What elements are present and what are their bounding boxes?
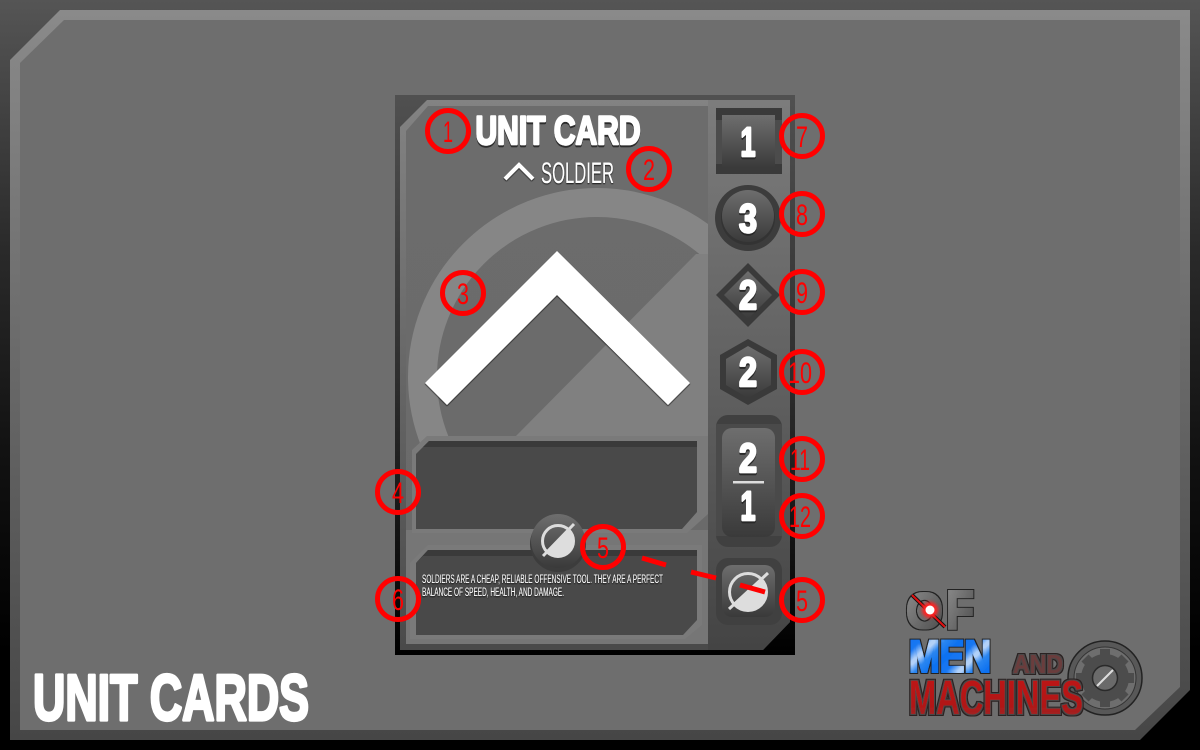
description text: BALANCE OF SPEED, HEALTH, AND DAMAGE.	[422, 587, 564, 599]
callout 12: 12	[789, 501, 811, 534]
callout 7: 7	[796, 121, 808, 154]
icon: circle stat 3: 3	[739, 197, 757, 241]
callout connector: 5	[642, 558, 765, 592]
callout 2: 2	[643, 154, 655, 187]
icon: square stat 1	[716, 108, 782, 174]
icon: large soldier chevron	[425, 251, 690, 405]
callout 5 on badge: 5	[597, 532, 609, 565]
subtitle: soldier: SOLDIER	[541, 157, 614, 190]
page heading: UNIT CARDS	[33, 661, 309, 734]
band between text panels	[406, 530, 708, 644]
callout 7	[782, 116, 822, 156]
callout 6	[378, 578, 418, 620]
callout 1: 1	[443, 116, 453, 149]
callout 3: 3	[457, 278, 469, 311]
logo word: of	[906, 579, 974, 641]
logo: of men and machines	[906, 579, 1142, 725]
callout 1	[428, 110, 468, 152]
icon: diamond stat 2	[716, 263, 780, 327]
icon: laser slash	[912, 595, 945, 627]
icon: small chevron	[505, 165, 533, 179]
icon: circle stat 3	[715, 185, 781, 251]
icon: faction badge	[530, 514, 586, 572]
callout 10	[782, 352, 822, 392]
callout 5 on button: 5	[796, 585, 808, 618]
callout 9	[782, 272, 822, 312]
description text: SOLDIERS ARE A CHEAP, RELIABLE OFFENSIVE TOOL. THEY ARE A PERFECT	[422, 574, 663, 586]
icon: attack / defense pill: 1	[740, 483, 756, 529]
panel: main card area	[406, 106, 708, 644]
callout 12	[782, 496, 822, 536]
title: UNIT CARD	[476, 109, 640, 153]
callout 2	[628, 148, 670, 190]
card art: emblem ring	[408, 188, 708, 442]
panel: right sidebar	[708, 100, 790, 650]
icon: diamond stat 2: 2	[739, 272, 757, 318]
icon: attack / defense pill	[716, 415, 782, 547]
callout 8	[782, 194, 822, 234]
icon: hexagon stat 2: 2	[739, 349, 757, 395]
icon: gear	[1068, 641, 1142, 715]
logo word: of: O	[906, 583, 943, 639]
callout 4	[378, 472, 418, 512]
callout 5 on button	[782, 580, 822, 620]
callout 6: 6	[392, 584, 404, 617]
logo word: men: MEN	[909, 631, 991, 682]
description text	[422, 574, 663, 599]
icon: hexagon stat 2	[720, 339, 777, 405]
callout 8: 8	[796, 199, 808, 232]
icon: square stat 1: 1	[740, 119, 756, 165]
logo word: of: F	[946, 579, 974, 641]
callout 10: 10	[788, 357, 812, 390]
panel: stat text box	[412, 436, 708, 533]
icon: attack / defense pill: 2	[739, 435, 757, 481]
callout 9: 9	[796, 277, 808, 310]
logo word: machines: MACHINES	[909, 672, 1083, 725]
callout 11: 11	[790, 444, 810, 477]
callout 5 on badge	[582, 526, 624, 568]
panel: description box	[410, 545, 702, 639]
callout 3	[442, 272, 484, 314]
logo word: and: AND	[1013, 649, 1063, 679]
panel: unit card	[395, 95, 800, 655]
callout 11	[782, 438, 822, 480]
icon: faction button	[716, 558, 782, 625]
subtitle: soldier	[505, 157, 614, 190]
callout 4: 4	[392, 477, 404, 510]
